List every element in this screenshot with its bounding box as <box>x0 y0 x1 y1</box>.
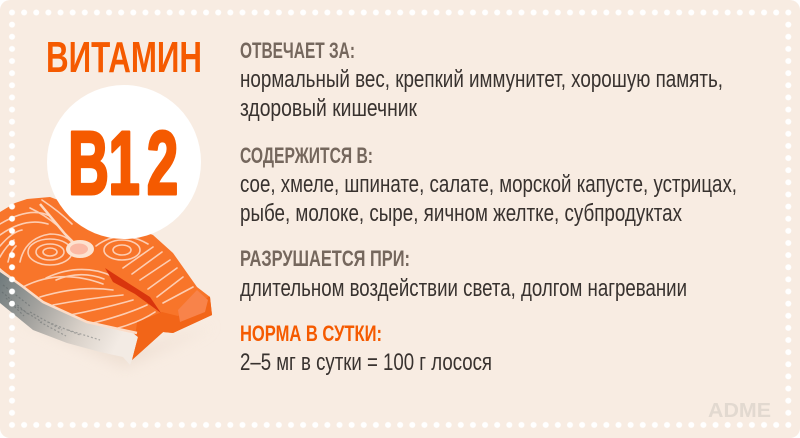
section: отвечает за: здоровый кишечник <box>240 95 417 122</box>
salmon side shading <box>132 312 163 362</box>
section: содержится в: рыбе, молоке, сыре, яичном желтке, субпродуктах <box>240 200 682 227</box>
salmon rings <box>0 200 193 328</box>
section: норма в сутки: НОРМА В СУТКИ: <box>240 321 382 346</box>
section: отвечает за <box>240 38 723 122</box>
salmon shadow <box>15 318 215 368</box>
section: отвечает за: ОТВЕЧАЕТ ЗА: <box>240 38 355 63</box>
section: содержится в <box>240 143 737 227</box>
salmon skin edge <box>0 270 137 333</box>
section: содержится в: СОДЕРЖИТСЯ В: <box>240 143 373 168</box>
salmon central septum <box>39 203 74 242</box>
salmon notch <box>105 268 161 313</box>
salmon flesh <box>0 197 212 360</box>
section: разрушается при: длительном воздействии света, долгом нагревании <box>240 275 687 302</box>
label: b12: B12 <box>68 113 178 213</box>
salmon steak illustration <box>0 197 215 368</box>
section: разрушается при: РАЗРУШАЕТСЯ ПРИ: <box>240 246 410 271</box>
section: норма в сутки <box>240 321 492 376</box>
section: разрушается при <box>240 246 687 302</box>
salmon skin <box>0 272 138 365</box>
white circle <box>47 85 201 239</box>
title: витамин: ВИТАМИН <box>46 33 202 82</box>
section: норма в сутки: 2–5 мг в сутки = 100 г лосося <box>240 349 492 376</box>
salmon backbone <box>66 240 94 258</box>
watermark: adme: ADME <box>708 400 771 422</box>
